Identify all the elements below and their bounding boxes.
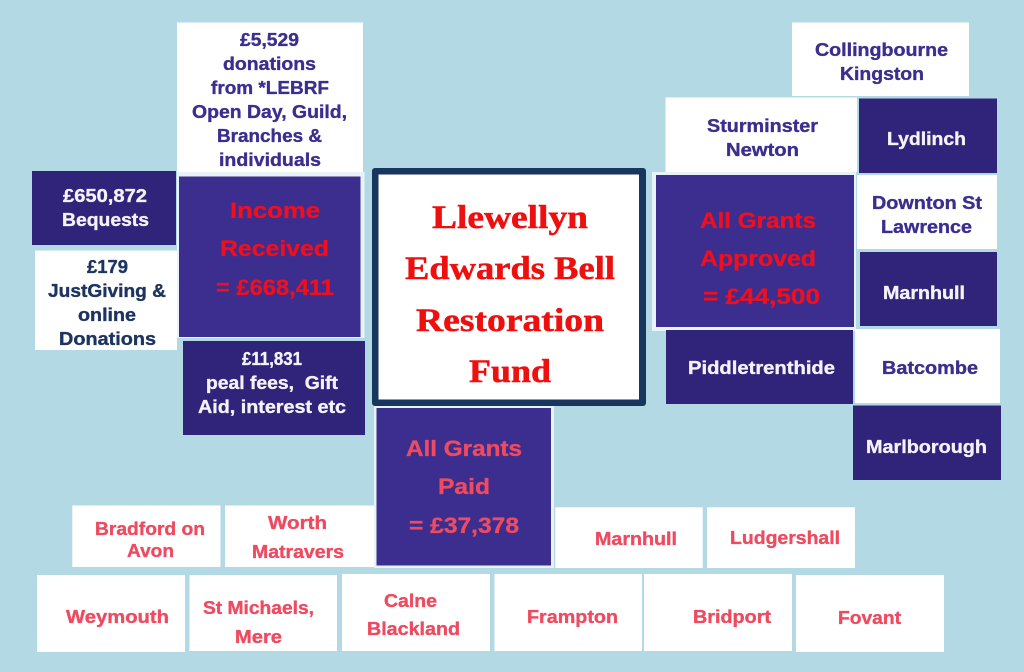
panel: all grants approved: Approved xyxy=(700,246,816,271)
paid: Bridport xyxy=(644,574,792,651)
grant: Marnhull approved: Marnhull xyxy=(883,283,965,303)
panel: JustGiving and online donations xyxy=(35,250,177,350)
paid: Calne Blackland: Blackland xyxy=(367,619,460,639)
paid: Weymouth: Weymouth xyxy=(66,607,169,627)
grant: Batcombe xyxy=(855,329,1000,403)
panel: bequests xyxy=(32,171,176,245)
panel: all grants paid xyxy=(374,406,554,568)
paid: Ludgershall: Ludgershall xyxy=(730,528,840,548)
panel: all grants approved: = £44,500 xyxy=(703,284,820,309)
paid: Weymouth xyxy=(37,575,185,652)
grant: Marnhull approved xyxy=(860,252,997,326)
panel: fund title: Llewellyn xyxy=(432,200,588,236)
paid: Bridport: Bridport xyxy=(693,607,771,627)
panel: peal fees: £11,831 xyxy=(242,349,302,369)
panel: JustGiving and online donations: £179 xyxy=(87,257,128,277)
panel: peal fees: Aid, interest etc xyxy=(198,397,346,417)
paid: Fovant: Fovant xyxy=(838,608,901,628)
paid: Fovant xyxy=(796,575,944,652)
panel: peal fees xyxy=(183,341,365,435)
panel: donations: individuals xyxy=(219,150,321,170)
grant: Lydlinch xyxy=(859,98,997,173)
grant: Downton St Lawrence xyxy=(857,175,997,249)
paid: Marnhull: Marnhull xyxy=(595,529,677,549)
grant: Sturminster Newton xyxy=(666,98,857,172)
grant: Sturminster Newton: Newton xyxy=(726,140,799,160)
grant: Lydlinch: Lydlinch xyxy=(887,129,966,149)
panel: donations: £5,529 xyxy=(240,30,299,50)
panel: all grants approved xyxy=(652,172,856,331)
grant: Batcombe: Batcombe xyxy=(882,358,978,378)
grant: Downton St Lawrence: Lawrence xyxy=(881,217,972,237)
paid: Calne Blackland: Calne xyxy=(384,591,437,611)
paid: Calne Blackland xyxy=(342,574,490,651)
panel: JustGiving and online donations: online xyxy=(78,305,136,325)
panel: bequests: Bequests xyxy=(62,210,149,230)
grant: Piddletrenthide: Piddletrenthide xyxy=(688,358,835,378)
panel: donations: Open Day, Guild, xyxy=(192,102,347,122)
panel: income received xyxy=(177,172,364,338)
panel: all grants approved: All Grants xyxy=(700,208,816,233)
grant: Collingbourne Kingston: Kingston xyxy=(840,64,924,84)
panel: fund title: Restoration xyxy=(416,303,604,339)
panel: all grants paid: = £37,378 xyxy=(409,513,519,538)
panel: income received: Income xyxy=(230,198,320,223)
panel: donations xyxy=(177,22,363,172)
grant: Collingbourne Kingston xyxy=(792,22,969,96)
grant: Marlborough: Marlborough xyxy=(866,437,987,457)
grant: Downton St Lawrence: Downton St xyxy=(872,193,982,213)
grant: Piddletrenthide xyxy=(666,330,853,404)
paid: Marnhull xyxy=(555,507,703,568)
panel: donations: from *LEBRF xyxy=(211,78,329,98)
panel: bequests: £650,872 xyxy=(63,186,147,206)
grant: Sturminster Newton: Sturminster xyxy=(707,116,818,136)
paid: Worth Matravers xyxy=(225,506,374,567)
panel: fund title: Edwards Bell xyxy=(405,251,615,287)
panel: income received: = £668,411 xyxy=(216,275,334,300)
paid: Bradford on Avon xyxy=(72,506,220,567)
panel: all grants paid: Paid xyxy=(438,474,490,499)
panel: JustGiving and online donations: Donations xyxy=(59,329,156,349)
paid: Worth Matravers: Worth xyxy=(268,513,327,533)
paid: Ludgershall xyxy=(707,507,855,568)
panel: fund title xyxy=(372,168,646,406)
panel: income received: Received xyxy=(220,236,329,261)
panel: fund title: Fund xyxy=(469,354,551,390)
panel: JustGiving and online donations: JustGiving & xyxy=(48,281,166,301)
panel: peal fees: peal fees, Gift xyxy=(206,373,338,393)
paid: St Michaels, Mere: St Michaels, xyxy=(203,598,314,618)
panel: donations: Branches & xyxy=(217,126,322,146)
paid: St Michaels, Mere: Mere xyxy=(235,627,282,647)
paid: Frampton: Frampton xyxy=(527,607,618,627)
paid: Worth Matravers: Matravers xyxy=(252,542,344,562)
paid: Bradford on Avon: Avon xyxy=(127,541,174,561)
paid: Bradford on Avon: Bradford on xyxy=(95,519,205,539)
panel: donations: donations xyxy=(223,54,316,74)
paid: Frampton xyxy=(494,574,642,651)
grant: Collingbourne Kingston: Collingbourne xyxy=(815,40,948,60)
grant: Marlborough xyxy=(853,406,1001,480)
panel: all grants paid: All Grants xyxy=(406,436,522,461)
paid: St Michaels, Mere xyxy=(190,575,337,651)
